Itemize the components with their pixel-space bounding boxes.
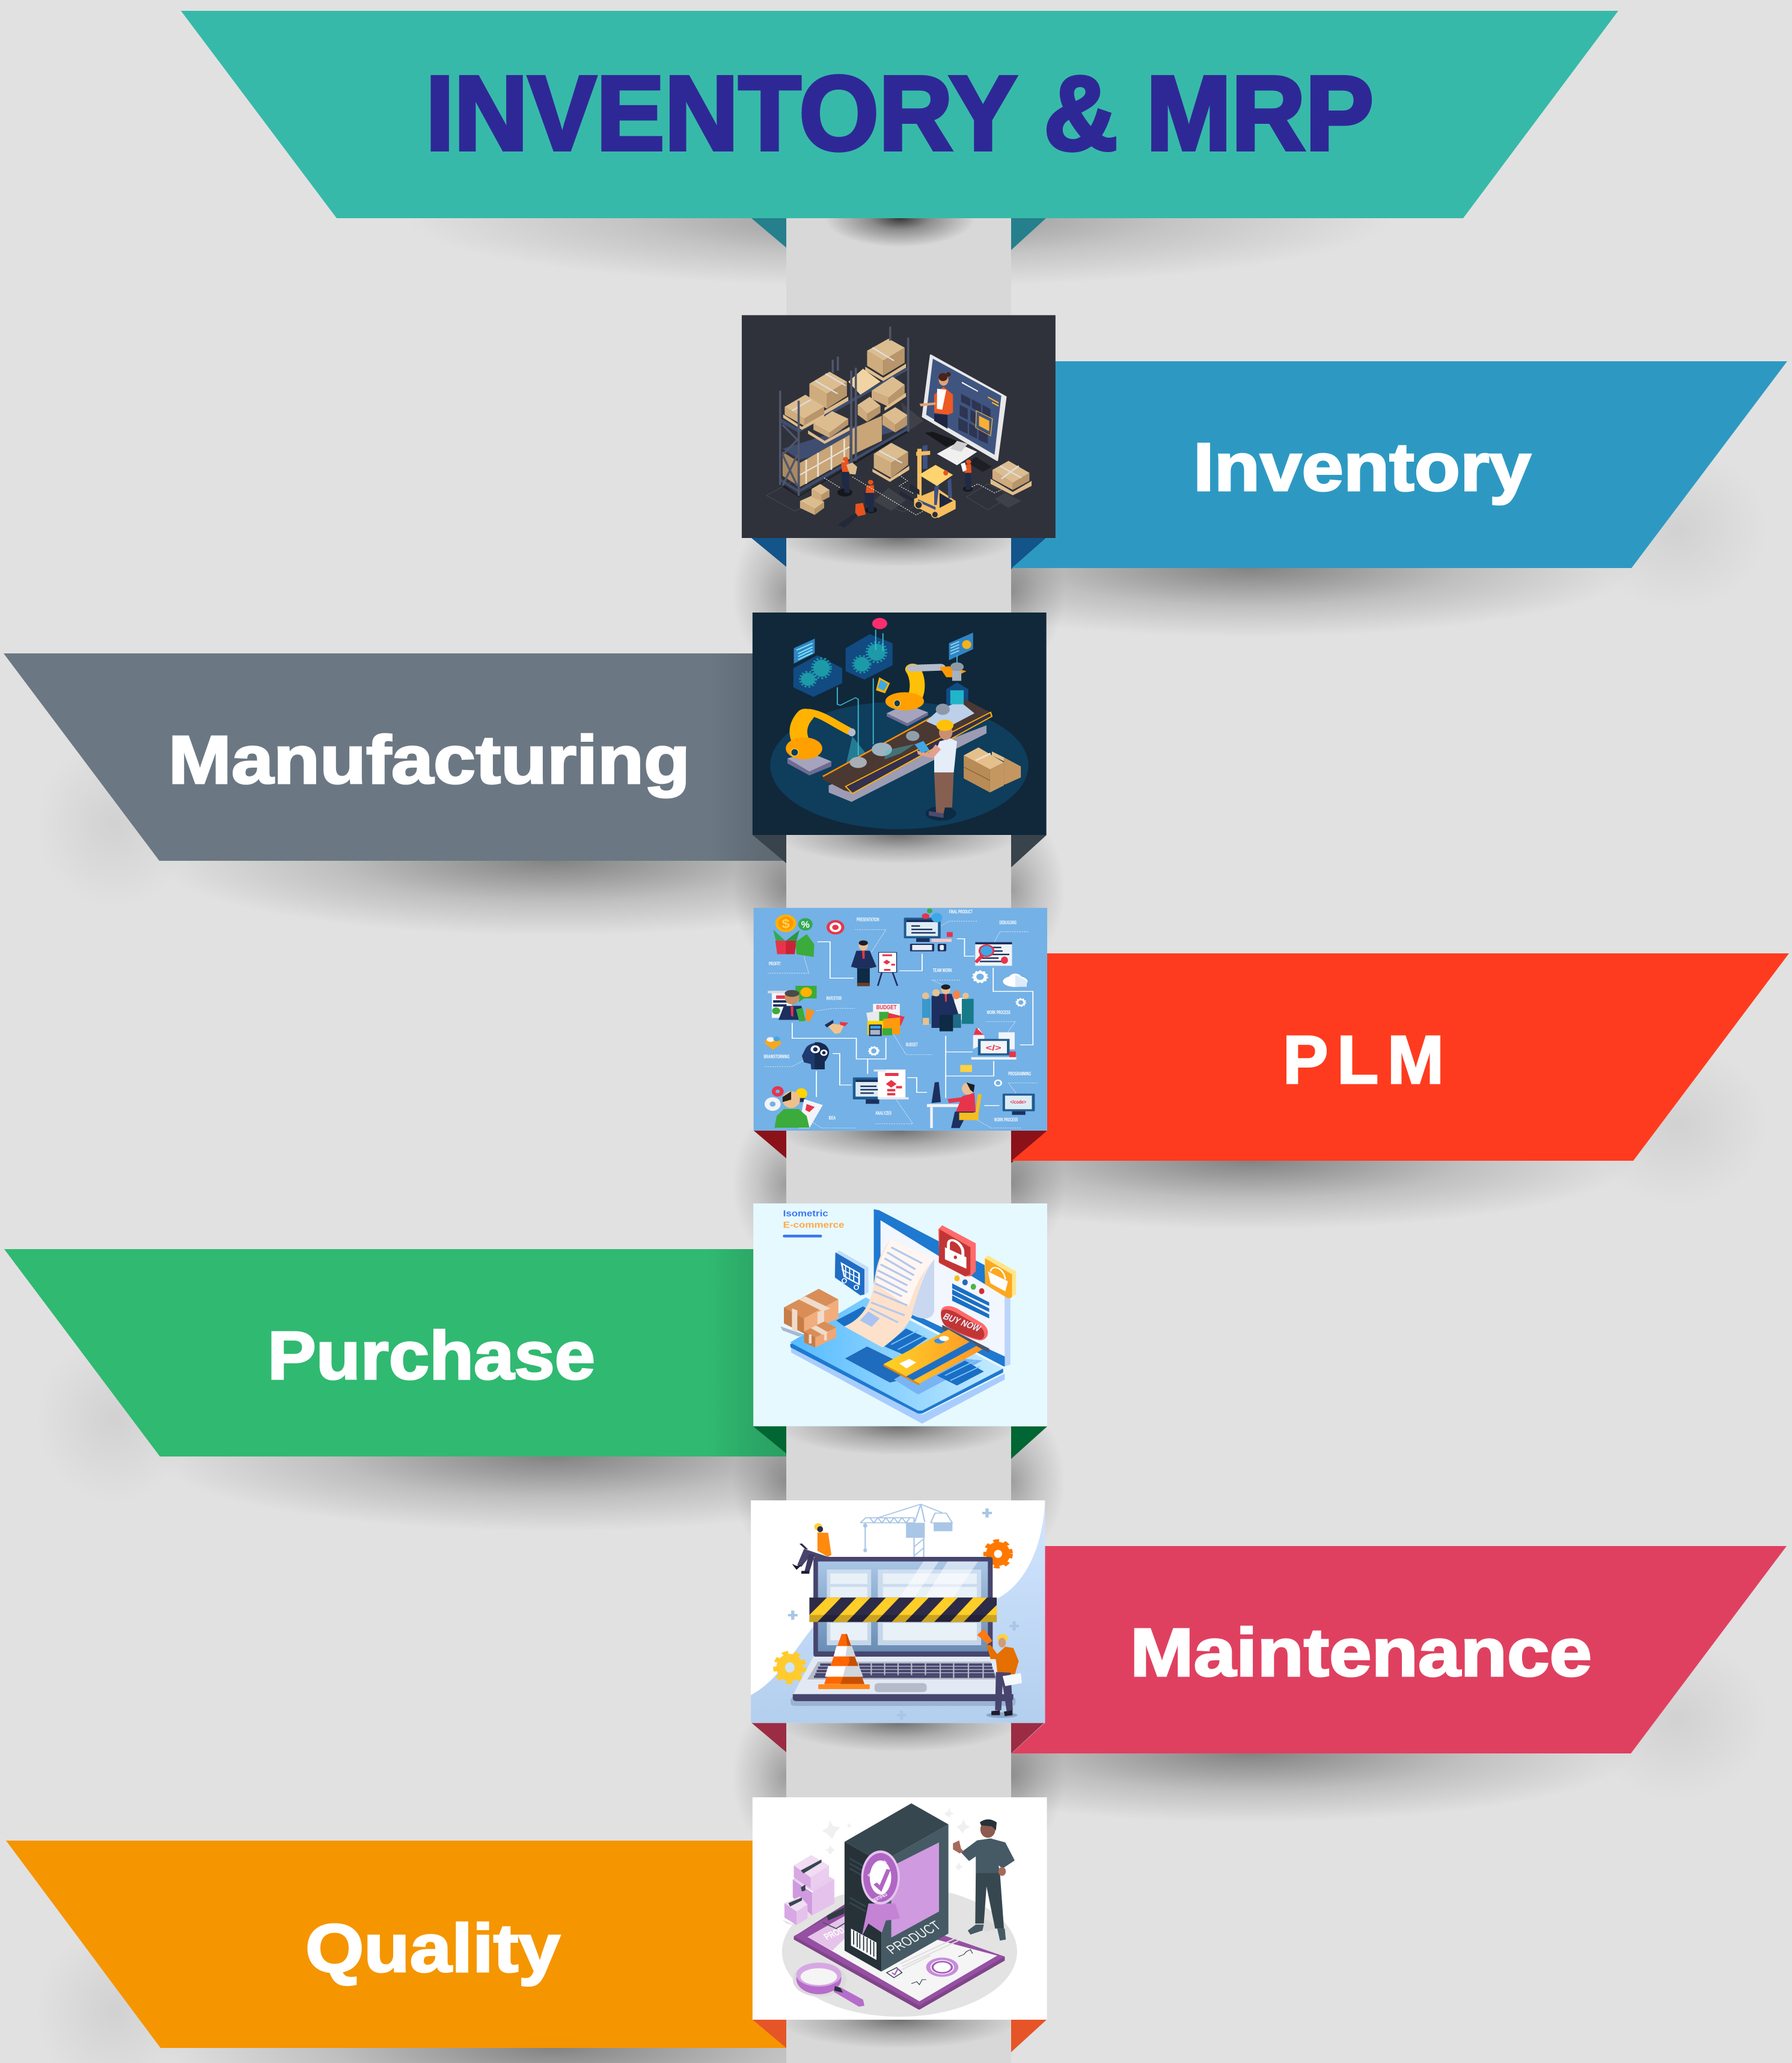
clipboard [794, 1904, 1005, 2010]
investor [768, 986, 816, 1022]
quality rosette [861, 1850, 900, 1937]
captions: TEAM WORK [933, 968, 952, 974]
Manufacturing label: Manufacturing [168, 722, 690, 798]
brainstorming head and box [765, 1036, 829, 1069]
sitting worker [792, 1523, 831, 1574]
cart tile [835, 1250, 869, 1295]
handshake [825, 1020, 848, 1034]
profit plant [773, 914, 814, 957]
captions: BRAINSTORMING [764, 1054, 789, 1060]
robot arms [786, 662, 967, 775]
boxes on shelves [783, 338, 1032, 515]
Purchase ribbon [4, 1249, 786, 1456]
monitor with agent [919, 355, 1006, 472]
captions: PRESENTATION [857, 917, 879, 923]
Inventory ribbon [1012, 361, 1787, 568]
shelf uprights [780, 326, 908, 496]
analysis monitor and flowchart [853, 1069, 909, 1104]
title ribbon [181, 11, 1618, 218]
crane [860, 1504, 952, 1557]
illustration: isometric warehouse [742, 315, 1056, 538]
product box [845, 1803, 949, 1972]
panel: Maintenance [751, 1500, 1787, 1753]
captions: WORK PROCESS [994, 1117, 1018, 1123]
captions: INVESTOR [827, 996, 842, 1001]
basket tile [985, 1255, 1016, 1298]
cloud and gears [869, 971, 1027, 1086]
title: INVENTORY & MRP [426, 55, 1374, 173]
illustration caption: E-commerce [783, 1220, 845, 1230]
laptop and rocket [971, 1028, 1017, 1060]
profit plant: $ [781, 917, 790, 931]
Quality label: Quality [305, 1910, 560, 1986]
budget folder: BUDGET [876, 1004, 897, 1011]
panel: Purchase [4, 1203, 1047, 1459]
captions: PROFIT! [769, 961, 781, 967]
Quality folds [753, 2020, 1047, 2052]
engineer with tablet [914, 720, 957, 821]
central column [786, 218, 1011, 2063]
captions: WORK PROCESS [987, 1010, 1011, 1016]
stars [822, 1808, 970, 1871]
panel: Quality [6, 1797, 1047, 2052]
debugging window [974, 942, 1012, 966]
illustration: project workflow flowchart [754, 908, 1047, 1131]
idea person [765, 1086, 823, 1128]
illustration: certified quality product [753, 1797, 1047, 2020]
Quality ribbon [6, 1841, 786, 2048]
code monitor [1003, 1093, 1035, 1115]
Purchase label: Purchase [268, 1318, 595, 1393]
Purchase folds [753, 1426, 1047, 1459]
PLM folds [754, 1131, 1047, 1163]
final product workstation [904, 908, 953, 952]
workers and pallet jack [837, 457, 973, 528]
parcels [780, 1289, 839, 1348]
laptop and rocket: </> [986, 1044, 1002, 1053]
programmer at desk [927, 1082, 982, 1128]
presenter and flip chart [851, 940, 898, 986]
Inventory folds [751, 538, 1046, 569]
traffic cone [818, 1634, 870, 1689]
worker with megaphone [977, 1628, 1022, 1718]
panel: PLM [754, 908, 1789, 1163]
hazard tape [809, 1598, 997, 1622]
lock tile [938, 1225, 976, 1276]
team [922, 985, 974, 1032]
conveyor belt [823, 690, 992, 802]
captions [764, 909, 1031, 1123]
screen dots, text lines, buy button [941, 1276, 989, 1352]
product box: PRODUCT [883, 1919, 944, 1957]
Inventory label: Inventory [1193, 429, 1531, 505]
man giving thumbs up [953, 1820, 1015, 1940]
laptop [790, 1557, 1015, 1706]
illustration: isometric e-commerce laptop [753, 1203, 1047, 1426]
forklift [900, 445, 956, 518]
illustration: project workflow flowchart: PROGRAMMING [1008, 1071, 1031, 1077]
folder [960, 1065, 972, 1072]
illustration: smart factory conveyor [753, 613, 1047, 835]
laptop [790, 1209, 1010, 1423]
Manufacturing ribbon [4, 653, 786, 861]
profit plant: % [801, 920, 810, 930]
quality rosette: CERTIFIED [870, 1892, 889, 1904]
panel: Manufacturing [4, 613, 1047, 867]
Maintenance label: Maintenance [1130, 1615, 1592, 1690]
column shadows under each picture [790, 218, 1008, 2046]
dotted routes [824, 475, 1002, 515]
captions: BUDGET [906, 1042, 918, 1048]
budget folder [866, 1004, 905, 1036]
panel: title banner [181, 11, 1618, 250]
code monitor: </code> [1010, 1099, 1027, 1105]
Maintenance folds [751, 1723, 1044, 1753]
dotted leaders [764, 921, 1038, 1128]
screen dots, text lines, buy button: BUY NOW [941, 1311, 983, 1333]
Maintenance ribbon [1012, 1546, 1787, 1753]
PLM label: P L M [1283, 1022, 1444, 1098]
captions: DEBUGGING [1000, 920, 1017, 926]
gears [775, 1541, 1011, 1682]
captions: ANALYZES [875, 1111, 891, 1116]
digital twin hexagons [794, 634, 968, 712]
PLM ribbon [1012, 953, 1789, 1161]
quality rosette: BEST QUALITY [866, 1859, 890, 1878]
illustration caption [783, 1208, 845, 1238]
captions: IDEA [829, 1116, 836, 1121]
receipt [844, 1239, 934, 1348]
captions: FINAL PRODUCT [949, 909, 973, 915]
workflow arrows [792, 939, 1033, 1105]
stacked purple boxes [782, 1855, 834, 1925]
clipboard: PROD [821, 1925, 847, 1942]
magnifying glass [793, 1963, 864, 2006]
panel: Inventory [742, 315, 1787, 569]
illustration: website under construction [751, 1500, 1045, 1723]
illustration caption: Isometric [783, 1208, 828, 1218]
credit card [884, 1330, 982, 1386]
target [827, 920, 844, 935]
title folds [751, 218, 1046, 250]
stacked cartons [964, 747, 1021, 792]
Manufacturing folds [753, 835, 1047, 867]
